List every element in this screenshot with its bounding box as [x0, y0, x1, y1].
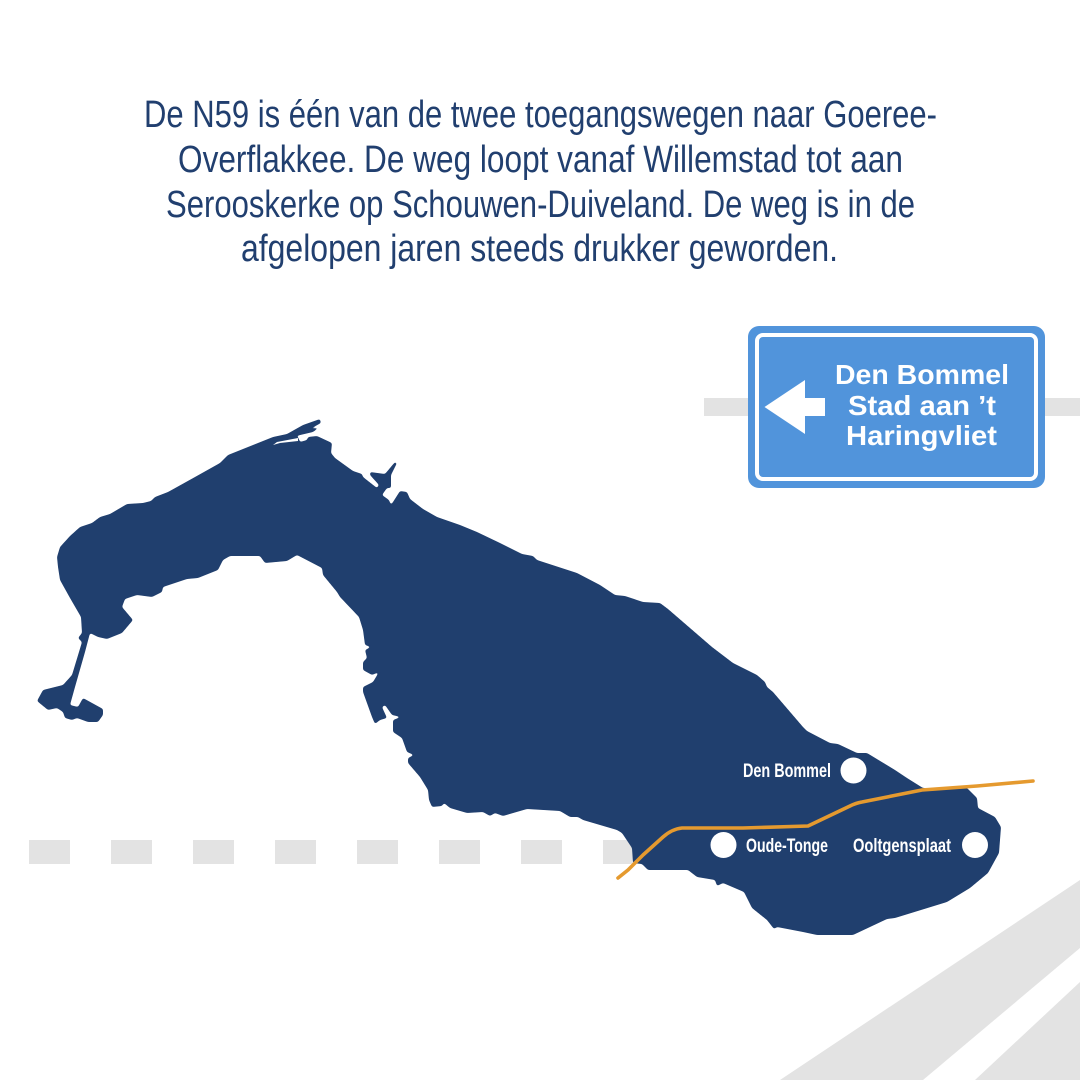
- road sign: [748, 326, 1045, 488]
- place: Den Bommel: Den Bommel: [743, 760, 831, 782]
- map: Goeree-Overflakkee island: [37, 419, 1001, 935]
- place: Oude-Tonge: Oude-Tonge: [746, 835, 828, 857]
- icon: white left arrow: [764, 380, 825, 434]
- place: Ooltgensplaat: Ooltgensplaat: [853, 835, 951, 857]
- title paragraph: Serooskerke op Schouwen-Duiveland. De weg is in de: [166, 184, 915, 226]
- route: N59 road: [618, 781, 1033, 878]
- title paragraph: afgelopen jaren steeds drukker geworden.: [241, 228, 838, 270]
- sign text: Haringvliet: [846, 420, 997, 451]
- road markings: dashed centre line: [29, 840, 644, 864]
- road marking behind sign: [704, 398, 1080, 416]
- title paragraph: [144, 94, 937, 270]
- place: Oude-Tonge: [710, 832, 828, 858]
- sign text: [835, 359, 1009, 451]
- title paragraph: Overflakkee. De weg loopt vanaf Willemstad tot aan: [178, 139, 903, 181]
- sign text: Den Bommel: [835, 359, 1009, 390]
- sign text: Stad aan ’t: [848, 390, 996, 421]
- road markings: diagonal lanes: [780, 880, 1080, 1080]
